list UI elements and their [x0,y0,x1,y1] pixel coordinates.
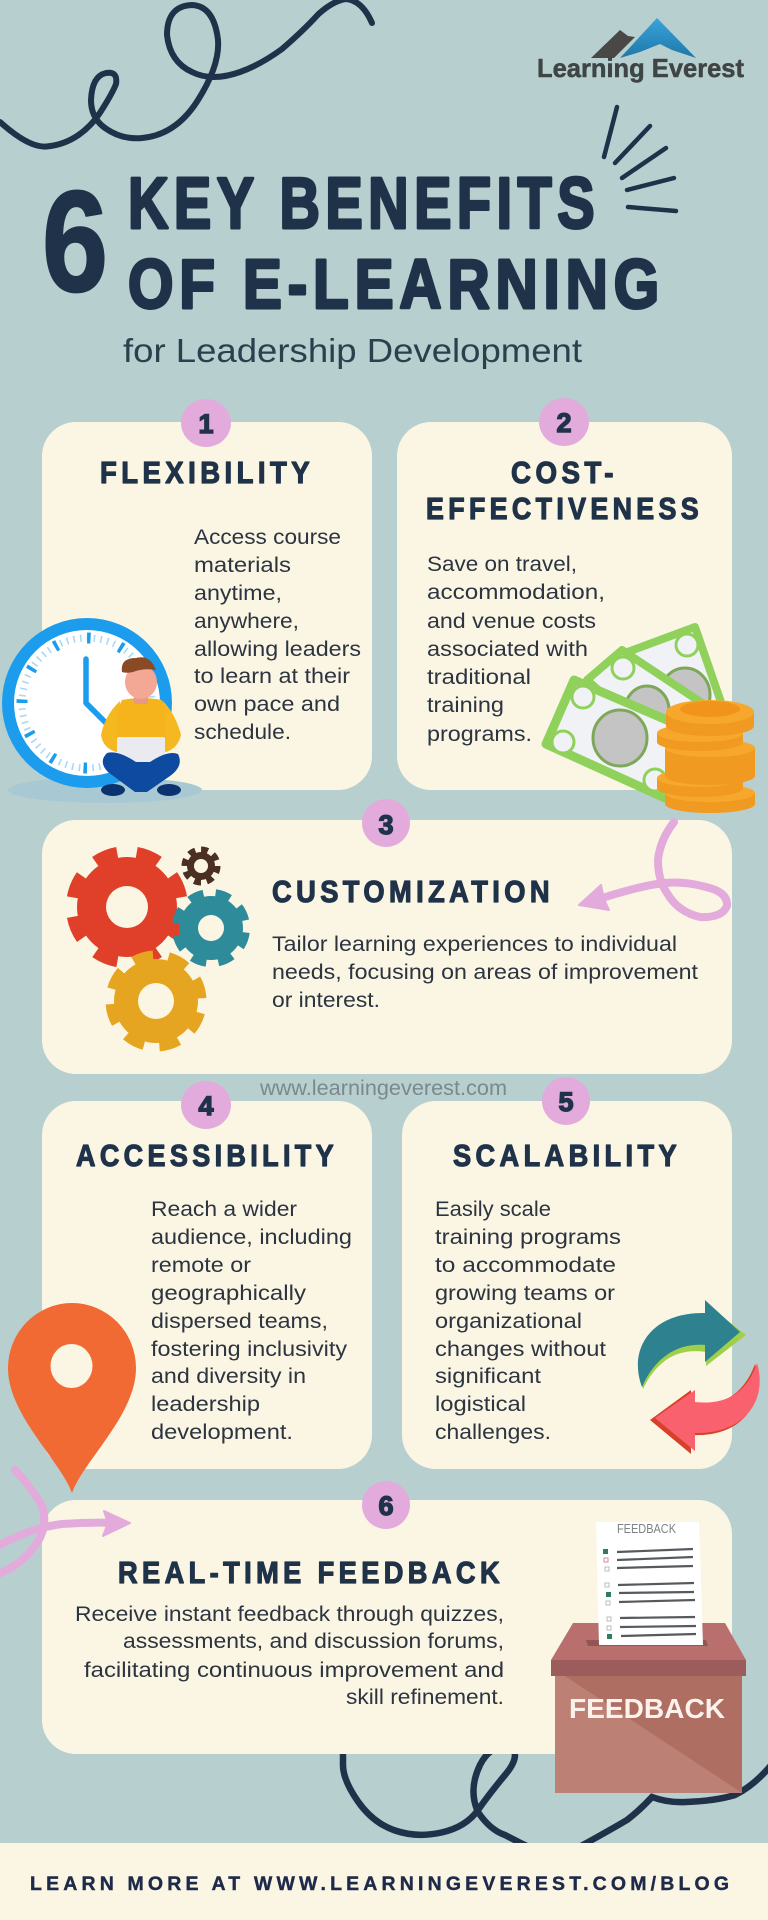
heading: flexibility: FLEXIBILITY [100,455,314,490]
text: accessibility description: Reach a wider [151,1198,297,1221]
text: cost description: Save on travel, [427,553,577,576]
heading: cost-effectiveness [426,455,703,526]
icon: burst lines [604,107,676,211]
text: flexibility description: allowing leaders [194,638,361,661]
icon: feedback box: FEEDBACK [569,1693,725,1724]
text: customization description: needs, focusing on areas of improvement [272,961,698,984]
decorative squiggle: top left [0,0,372,147]
text: scalability description: challenges. [435,1421,551,1444]
icon: feedback box [551,1521,746,1793]
text: accessibility description: geographically [151,1282,307,1305]
text: cost description [427,553,605,746]
badge: number 4: 4 [198,1091,214,1121]
icon: person sitting by clock [2,618,202,803]
text: feedback description [75,1603,504,1709]
text: scalability description: changes without [435,1338,606,1361]
arrow: pink loop to feedback [0,1470,130,1574]
badge: number 5: 5 [558,1087,574,1117]
text: flexibility description: anywhere, [194,610,299,633]
text: customization description: Tailor learning experiences to individual [272,933,677,956]
arrow: pink loop to heading [579,822,727,917]
text: customization description [272,933,698,1012]
icon: gears [66,846,250,1056]
text: scalability description: growing teams or [435,1282,615,1305]
text: accessibility description [151,1198,352,1444]
text: flexibility description [194,526,361,744]
text: flexibility description: schedule. [194,721,291,744]
heading: scalability: SCALABILITY [453,1138,681,1173]
icon: cycle arrows [638,1300,760,1454]
panel: customization [42,799,732,1074]
text: scalability description: training programs [435,1226,621,1249]
decorative squiggle: bottom [343,1745,768,1852]
footer text: LEARN MORE AT WWW.LEARNINGEVEREST.COM/BLOG [30,1873,729,1895]
text: accessibility description: and diversity in [151,1365,306,1388]
panel: real-time feedback [42,1481,746,1793]
icon: feedback box: FEEDBACK [617,1521,676,1536]
text: cost description: programs. [427,723,532,746]
text: cost description: training [427,694,504,717]
title: 6 [42,161,108,322]
text: customization description: or interest. [272,989,380,1012]
text: accessibility description: remote or [151,1254,251,1277]
panel: scalability [402,1077,760,1469]
text: flexibility description: anytime, [194,582,282,605]
text: feedback description: facilitating continuous improvement and [84,1659,504,1682]
panel: accessibility [8,1081,372,1493]
title: OF E-LEARNING [128,245,665,323]
badge: number 3: 3 [378,810,394,840]
badge: number 6: 6 [378,1491,394,1521]
title: KEY BENEFITS [128,164,600,244]
text: feedback description: skill refinement. [346,1686,504,1709]
text: cost description: accommodation, [427,581,605,604]
badge: number 1 [181,399,231,447]
text: scalability description: Easily scale [435,1198,551,1221]
text: accessibility description: fostering inclusivity [151,1338,348,1361]
heading: cost-effectiveness: EFFECTIVENESS [426,491,703,526]
text: scalability description: significant [435,1365,541,1388]
badge: number 2 [539,398,589,446]
badge: number 5 [542,1077,590,1125]
text: cost description: and venue costs [427,610,596,633]
text: accessibility description: audience, including [151,1226,352,1249]
text: scalability description [435,1198,621,1444]
panel: cost-effectiveness [397,398,755,813]
badge: number 3 [362,799,410,847]
footer band [0,1843,768,1920]
subtitle: for Leadership Development [123,332,582,369]
badge: number 2: 2 [556,408,572,438]
heading: customization: CUSTOMIZATION [272,874,554,909]
logo: Learning Everest: Learning Everest [537,53,744,83]
text: accessibility description: development. [151,1421,293,1444]
text: feedback description: Receive instant feedback through quizzes, [75,1603,504,1626]
badge: number 1: 1 [198,409,214,439]
text: cost description: traditional [427,666,531,689]
heading: cost-effectiveness: COST- [511,455,618,490]
text: accessibility description: dispersed teams, [151,1310,328,1333]
heading: real-time feedback: REAL-TIME FEEDBACK [118,1555,504,1590]
title [42,161,665,323]
text: flexibility description: Access course [194,526,341,549]
text: flexibility description: own pace and [194,693,340,716]
text: scalability description: logistical [435,1393,526,1416]
text: website address: www.learningeverest.com [259,1077,507,1100]
text: flexibility description: materials [194,554,291,577]
logo: Learning Everest [537,18,744,83]
text: accessibility description: leadership [151,1393,260,1416]
text: scalability description: organizational [435,1310,582,1333]
text: flexibility description: to learn at their [194,665,350,688]
text: feedback description: assessments, and discussion forums, [123,1630,504,1653]
icon: map pin [8,1303,136,1493]
heading: accessibility: ACCESSIBILITY [76,1138,338,1173]
badge: number 4 [181,1081,231,1129]
text: scalability description: to accommodate [435,1254,616,1277]
badge: number 6 [362,1481,410,1529]
icon: banknotes and coins [546,627,755,813]
text: cost description: associated with [427,638,588,661]
panel: flexibility [2,399,372,803]
